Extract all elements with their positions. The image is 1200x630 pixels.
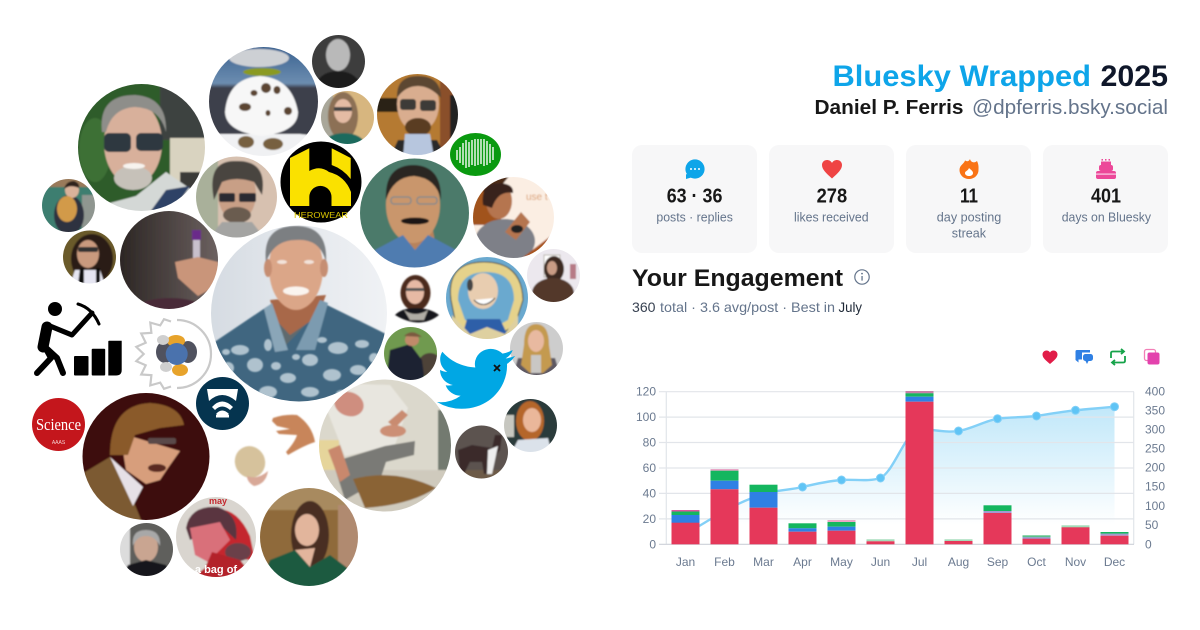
user name and handle: Daniel P. Ferris xyxy=(814,97,964,119)
left axis labels: 20 xyxy=(643,512,656,526)
month labels: Jan xyxy=(676,555,695,569)
avatar: green waveform logo xyxy=(450,133,501,176)
left axis labels: 60 xyxy=(643,461,656,475)
right axis labels: 350 xyxy=(1145,404,1165,418)
icon: cake xyxy=(1096,159,1116,179)
stat card: streak: day posting xyxy=(937,210,1001,224)
bar: Sep xyxy=(984,505,1012,544)
left axis labels: 80 xyxy=(643,436,656,450)
month labels: Oct xyxy=(1027,555,1046,569)
stacked bars xyxy=(672,391,1128,544)
avatar bubble cluster xyxy=(32,33,582,590)
month labels: Apr xyxy=(793,555,812,569)
month labels: Dec xyxy=(1104,555,1125,569)
icon: miner with pickaxe and bars xyxy=(37,302,122,376)
engagement summary line: 360 xyxy=(632,299,656,315)
icon: teal arches logo xyxy=(196,377,249,430)
avatar: illustrated woman in red hood: a bag of xyxy=(195,564,237,576)
month labels: Jul xyxy=(912,555,927,569)
avatar: speaker in brown jacket xyxy=(81,391,211,522)
left axis labels: 0 xyxy=(649,537,656,551)
avatar: blonde woman xyxy=(510,322,563,375)
month labels: Sep xyxy=(987,555,1008,569)
month labels xyxy=(676,555,1125,569)
bar: May xyxy=(828,520,856,544)
user name and handle: @dpferris.bsky.social xyxy=(972,97,1168,119)
user name and handle xyxy=(814,97,1168,119)
stat card: streak: 11 xyxy=(960,186,978,208)
bar: Nov xyxy=(1062,525,1090,544)
right axis labels: 250 xyxy=(1145,442,1165,456)
month labels: Jun xyxy=(871,555,890,569)
bar: Oct xyxy=(1022,535,1050,544)
bar: Aug xyxy=(944,539,972,544)
avatar: man with bookshelf xyxy=(375,72,460,157)
cumulative line xyxy=(686,407,1114,534)
avatar: Science journal logo xyxy=(32,398,85,451)
avatar: hand cutout xyxy=(272,415,315,455)
bar: Dec xyxy=(1100,532,1128,544)
avatar: Science journal logo: AAAS xyxy=(52,440,66,446)
stat card: likes: likes received xyxy=(794,210,869,224)
icon: info xyxy=(855,270,869,284)
right axis labels: 0 xyxy=(1145,537,1152,551)
right axis labels: 100 xyxy=(1145,499,1165,513)
avatar: Herowear logo xyxy=(280,142,362,222)
left axis labels: 40 xyxy=(643,486,656,500)
engagement summary line: July xyxy=(838,299,862,315)
right axis labels: 200 xyxy=(1145,460,1165,474)
engagement heading: Your Engagement xyxy=(632,265,843,292)
avatar: man presenting xyxy=(473,177,554,258)
avatar: Science journal logo: Science xyxy=(36,415,81,434)
avatar: man with dark glasses and messy hair xyxy=(194,155,279,240)
shirt xyxy=(210,295,388,405)
engagement chart xyxy=(636,384,1165,569)
stat card: likes: 278 xyxy=(817,186,847,208)
avatar: girl with glasses xyxy=(63,230,116,284)
bar: Apr xyxy=(788,523,816,544)
grid lines xyxy=(659,392,1134,544)
cumulative area xyxy=(686,407,1114,544)
avatar: hand holding vial xyxy=(120,211,218,309)
icon: reposts xyxy=(1111,349,1125,365)
month labels: Feb xyxy=(714,555,735,569)
bar: Jul xyxy=(906,391,934,544)
month labels: Mar xyxy=(753,555,774,569)
avatar: woman with glasses xyxy=(321,91,374,144)
right axis labels xyxy=(1145,384,1165,551)
right axis labels: 300 xyxy=(1145,422,1165,436)
icon: replies xyxy=(1076,350,1093,364)
avatar: man with mustache xyxy=(358,156,471,270)
icon: chat bubble xyxy=(685,159,705,179)
stat card: days on Bluesky xyxy=(1043,145,1168,253)
stat card: likes xyxy=(769,145,894,253)
avatar: black and white man xyxy=(312,35,365,88)
stat card: posts and replies: 63 · 36 xyxy=(667,186,722,208)
right axis labels: 150 xyxy=(1145,480,1165,494)
month labels: May xyxy=(830,555,853,569)
avatar: woman in green dress xyxy=(258,486,360,590)
chart legend icons xyxy=(1042,349,1160,365)
left axis labels: 100 xyxy=(636,410,656,424)
stat card: days on Bluesky: 401 xyxy=(1091,186,1121,208)
bar: Feb xyxy=(710,469,738,544)
icon: flame xyxy=(960,159,979,179)
right axis labels: 400 xyxy=(1145,384,1165,398)
icon: like xyxy=(1042,350,1058,364)
face xyxy=(264,226,328,310)
avatar: grey-haired man xyxy=(120,523,173,576)
avatar: woman in room xyxy=(527,249,580,302)
stat card: posts and replies: posts · replies xyxy=(656,210,733,224)
stat card: posts and replies xyxy=(632,145,757,253)
bar: Jan xyxy=(672,510,700,544)
icon: quotes xyxy=(1144,350,1160,364)
icon: gear logo with petals xyxy=(136,319,211,389)
avatar: brain in hand cutout xyxy=(230,441,270,486)
avatar: cartoon man in shark jaws xyxy=(444,255,530,341)
avatar: main profile portrait xyxy=(209,223,389,405)
avatar: girl holding dog xyxy=(42,179,95,232)
avatar: man in sunglasses xyxy=(76,82,208,215)
avatar: man in hat xyxy=(384,327,437,380)
avatar: woman with scarf xyxy=(395,275,439,322)
line markers xyxy=(798,403,1118,491)
stat card: streak xyxy=(906,145,1031,253)
avatar: dog xyxy=(455,426,508,478)
left axis labels xyxy=(636,384,656,551)
icon: heart xyxy=(822,160,842,178)
title: Bluesky Wrapped xyxy=(832,60,1091,93)
avatar: man with pangolin xyxy=(317,378,453,514)
stat card: streak: streak xyxy=(952,226,986,240)
right axis labels: 50 xyxy=(1145,518,1159,532)
avatar: woman with auburn hair xyxy=(504,399,557,452)
avatar: Herowear logo: HEROWEAR xyxy=(294,211,348,220)
avatar: snowman xyxy=(207,45,320,160)
bar: Mar xyxy=(750,485,778,544)
stat card: days on Bluesky: days on Bluesky xyxy=(1062,210,1151,224)
avatar: illustrated woman in red hood: may xyxy=(209,496,227,506)
avatar: illustrated woman in red hood xyxy=(176,497,256,577)
month labels: Nov xyxy=(1065,555,1086,569)
avatar: man presenting: use t xyxy=(526,192,548,203)
title: 2025 xyxy=(1100,60,1168,93)
icon: Twitter bird xyxy=(437,349,515,409)
engagement summary line: total · 3.6 avg/post · Best in xyxy=(660,299,835,315)
month labels: Aug xyxy=(948,555,969,569)
left axis labels: 120 xyxy=(636,384,656,398)
bar: Jun xyxy=(866,539,894,544)
